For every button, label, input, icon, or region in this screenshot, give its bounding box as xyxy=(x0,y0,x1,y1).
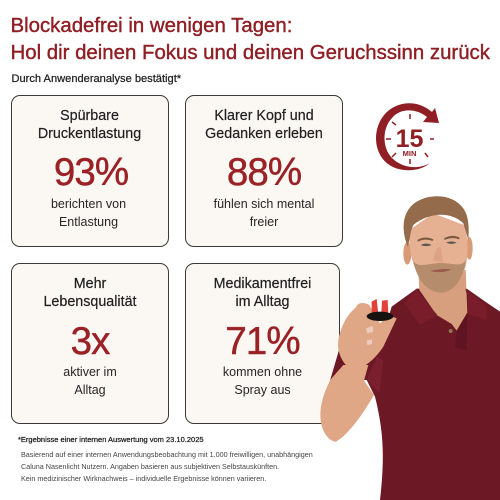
title xyxy=(10,15,490,64)
placket xyxy=(455,313,467,351)
card caption: kommen ohne xyxy=(223,365,302,379)
ears xyxy=(403,242,411,265)
card caption xyxy=(223,365,302,397)
arm xyxy=(320,365,374,442)
title: Hol dir deinen Fokus und deinen Geruchssinn zurück xyxy=(10,42,490,64)
card heading: Spürbare xyxy=(60,108,119,124)
panel: Klarer Kopf xyxy=(185,95,343,247)
timer unit: MIN xyxy=(403,149,416,158)
footnote body: Caluna Nasenlicht Nutzern. Angaben basieren aus subjektiven Selbstauskünften. xyxy=(21,462,279,471)
hand xyxy=(338,303,397,369)
card heading: Druckentlastung xyxy=(38,126,141,142)
shirt xyxy=(330,289,500,500)
hair xyxy=(404,196,469,247)
icon: 15 minute timer xyxy=(376,103,439,170)
panel: Medikamentfrei xyxy=(185,263,340,424)
card caption xyxy=(214,197,314,229)
stat 3x: 3x xyxy=(71,320,109,363)
footnote xyxy=(18,435,313,483)
person holding product xyxy=(320,196,500,500)
card caption: Alltag xyxy=(74,383,106,397)
card caption: Entlastung xyxy=(59,215,118,229)
card heading: Medikamentfrei xyxy=(214,276,311,292)
fingernails xyxy=(366,326,373,345)
card heading xyxy=(205,108,323,142)
stat 93%: 93% xyxy=(54,151,128,194)
neck xyxy=(418,270,467,331)
stat 88%: 88% xyxy=(227,151,301,194)
card caption: fühlen sich mental xyxy=(214,197,314,211)
nose shading xyxy=(433,247,443,263)
card heading: Klarer Kopf und xyxy=(214,108,314,124)
brows xyxy=(417,236,459,242)
title: Blockadefrei in wenigen Tagen: xyxy=(10,15,292,37)
card heading: Lebensqualität xyxy=(43,294,136,310)
card caption xyxy=(51,197,126,229)
timer number: 15 xyxy=(396,125,423,153)
card heading xyxy=(214,276,311,310)
face xyxy=(409,213,467,291)
card caption: freier xyxy=(250,215,278,229)
card caption: aktiver im xyxy=(63,365,117,379)
collar xyxy=(405,289,487,325)
panel: Lebensqualität xyxy=(11,263,169,424)
card caption: berichten von xyxy=(51,197,126,211)
panel: Druckentlastung xyxy=(11,95,169,247)
stat 71%: 71% xyxy=(225,320,300,363)
card heading xyxy=(38,108,141,142)
card caption xyxy=(63,365,117,397)
card caption: Spray aus xyxy=(234,383,291,397)
beard xyxy=(413,260,466,293)
product xyxy=(367,299,393,321)
subtitle: Durch Anwenderanalyse bestätigt* xyxy=(12,72,181,84)
footnote heading: *Ergebnisse einer internen Auswertung vom 23.10.2025 xyxy=(18,435,204,444)
card heading xyxy=(43,276,136,310)
sleeve shading xyxy=(367,357,383,393)
card heading: Mehr xyxy=(74,276,106,292)
footnote body: Basierend auf einer internen Anwendungsbeobachtung mit 1.000 freiwilligen, unabhängigen xyxy=(21,450,313,458)
footnote body xyxy=(21,450,313,483)
footnote body: Kein medizinischer Wirknachweis – individuelle Ergebnisse können variieren. xyxy=(21,474,266,483)
card heading: Gedanken erleben xyxy=(205,126,323,142)
eyes xyxy=(421,241,457,246)
card heading: im Alltag xyxy=(235,294,290,310)
